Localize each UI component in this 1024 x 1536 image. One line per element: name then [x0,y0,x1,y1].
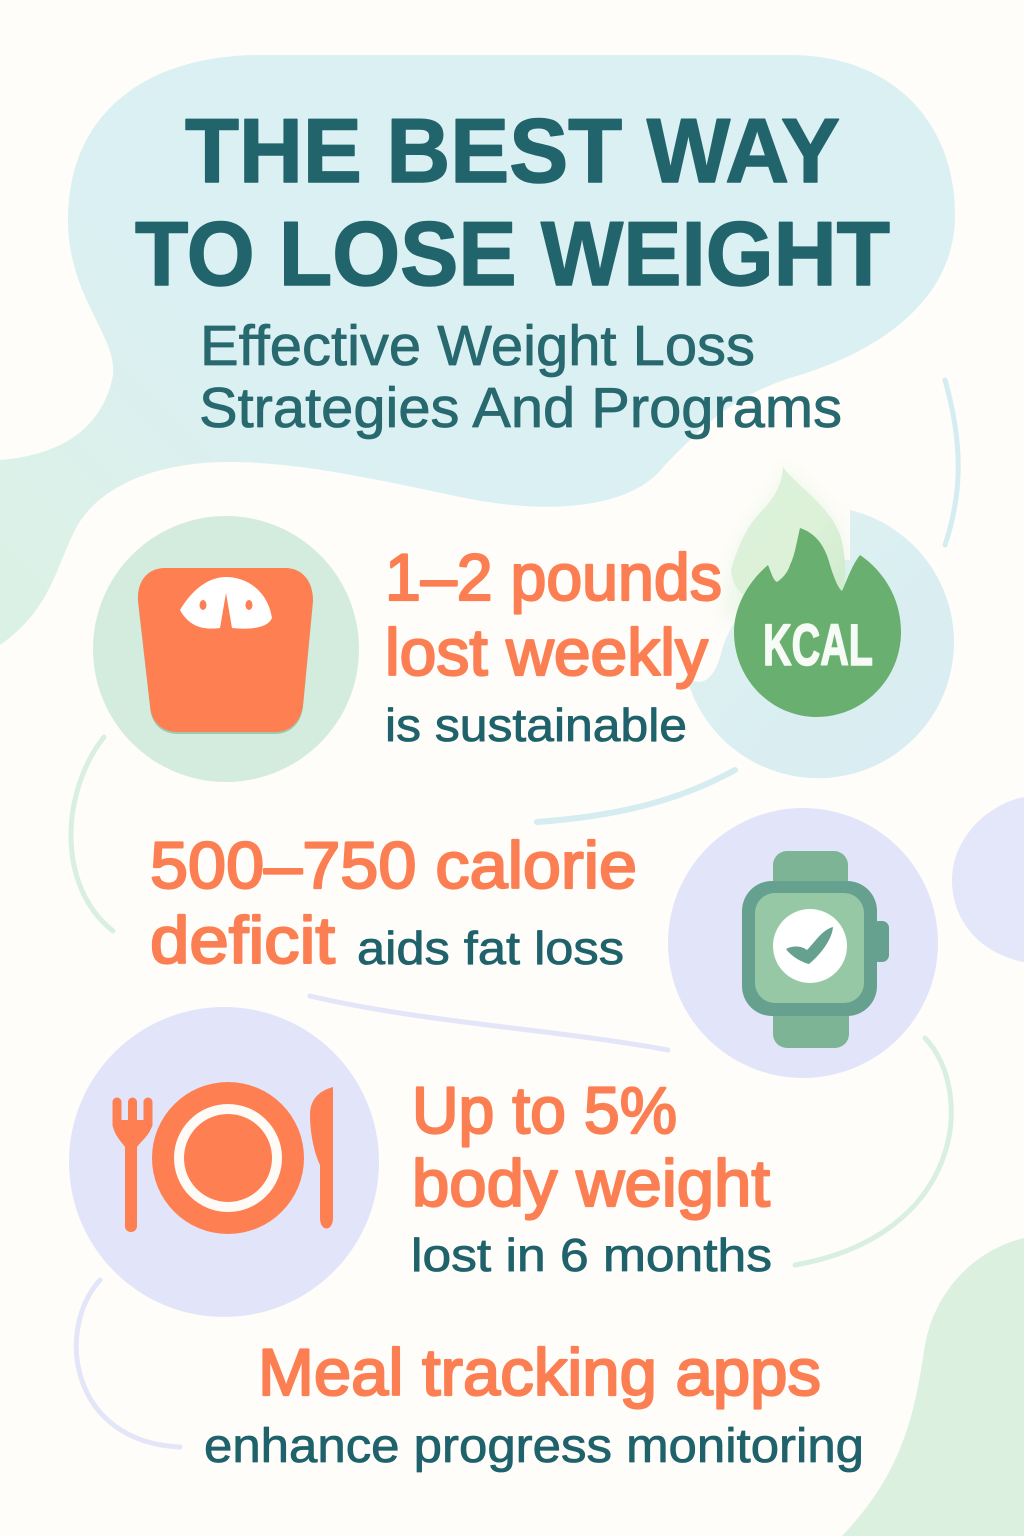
stat 2: calorie deficit: deficit [150,903,335,977]
stat 3: body weight: body weight [412,1146,770,1220]
icon: bathroom scale [93,516,359,782]
stat 1: 1–2 pounds [385,540,722,751]
stat 3: body weight: lost in 6 months [411,1229,772,1281]
fork [112,1102,153,1232]
connector curve: bottom lavender [76,1280,180,1447]
stat 4: meal tracking: enhance progress monitoring [204,1420,864,1473]
title [135,101,890,305]
stat 4: meal tracking [204,1335,864,1473]
kcal label: KCAL [763,613,873,678]
connector curve: right green [795,1038,951,1265]
icon: smartwatch [668,808,938,1078]
header blob [0,55,955,645]
stat 2: calorie deficit: aids fat loss [357,922,624,974]
stat 1: 1–2 pounds: is sustainable [385,699,687,751]
title: THE BEST WAY [185,101,840,202]
subtitle [199,314,842,440]
connector curve: left green [71,737,113,931]
title: TO LOSE WEIGHT [135,204,890,305]
subtitle: Effective Weight Loss [200,314,755,378]
stat 2: calorie deficit [150,828,637,977]
icon: kcal flame [686,467,954,778]
stat 1: 1–2 pounds: 1–2 pounds [385,540,722,614]
icon: plate with fork and knife [69,1007,379,1317]
connector curve: middle lavender [310,996,668,1050]
green corner blob [842,1238,1024,1536]
lavender side blob [952,797,1024,962]
stat 4: meal tracking: Meal tracking apps [258,1335,821,1409]
stat 1: 1–2 pounds: lost weekly [385,615,708,689]
stat 3: body weight: Up to 5% [412,1073,677,1147]
subtitle: Strategies And Programs [199,376,842,440]
connector curve: middle blue [537,770,735,822]
connector curve: top right [945,380,958,545]
stat 2: calorie deficit: 500–750 calorie [150,828,637,902]
knife [310,1087,333,1228]
stat 3: body weight [411,1073,772,1281]
